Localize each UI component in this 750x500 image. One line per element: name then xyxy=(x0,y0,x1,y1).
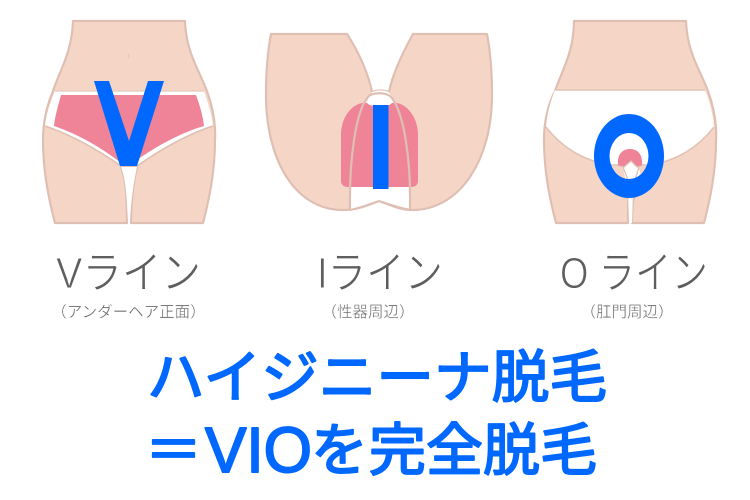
sublabel: O line: （肛門周辺） xyxy=(580,300,674,322)
heading: ＝ xyxy=(145,405,202,487)
label: I line: Iライン xyxy=(317,249,443,298)
heading: ハイジニーナ脱毛 xyxy=(147,332,607,414)
label: V line: Vライン xyxy=(56,249,201,298)
sublabel: I line: （性器周辺） xyxy=(321,300,415,322)
label: O line: O ライン xyxy=(560,249,708,298)
label: O line xyxy=(560,249,708,322)
sublabel: V line: （アンダーヘア正面） xyxy=(51,300,206,322)
heading: を完全脱毛 xyxy=(311,405,597,487)
illustration: O line xyxy=(544,21,716,223)
heading xyxy=(145,332,607,487)
illustration: I line xyxy=(266,34,492,210)
illustration: V line xyxy=(43,21,215,223)
label: V line xyxy=(51,249,206,322)
heading: VIO xyxy=(205,414,312,486)
label: I line xyxy=(317,249,443,322)
